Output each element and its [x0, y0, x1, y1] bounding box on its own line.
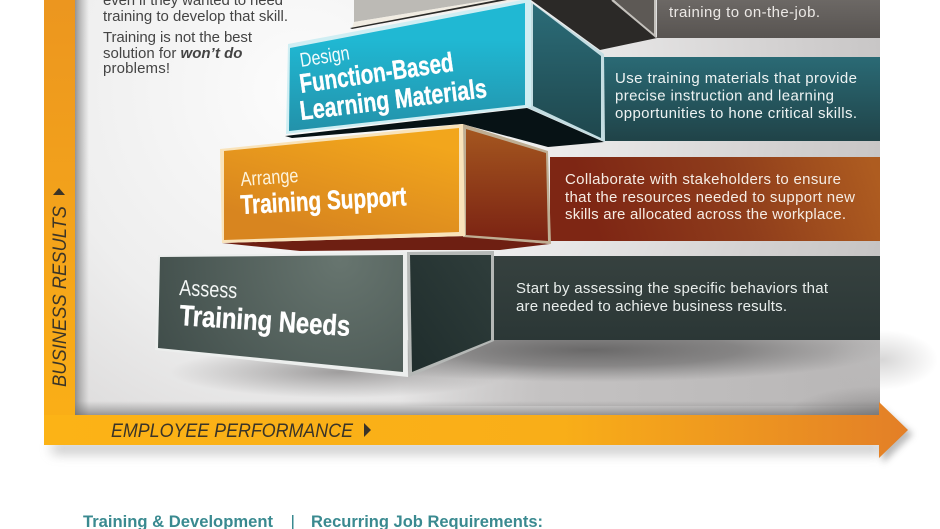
step: arrange training support: Arrange — [240, 165, 299, 191]
footer heading — [83, 513, 543, 529]
band: design materials: Use training materials that provide — [615, 70, 857, 87]
text: won't do note: training to develop that skill. — [103, 8, 288, 25]
text: won't do note: solution for won’t do — [103, 45, 242, 62]
axis drop shadow — [52, 408, 913, 463]
step: design function-based learning materials: Function-Based — [298, 47, 455, 99]
band: design materials — [604, 57, 880, 141]
axis: business results — [44, 0, 75, 445]
band: transfer step — [657, 0, 880, 38]
step: design function-based learning materials — [285, 0, 605, 147]
step: assess training needs: Assess — [179, 275, 238, 303]
text: won't do note: Training is not the best — [103, 29, 253, 46]
outer shadow right of panel — [826, 330, 938, 390]
step: top gray block — [350, 0, 657, 50]
band: assess needs: Start by assessing the specific behaviors that — [516, 280, 829, 297]
step: assess training needs — [155, 251, 494, 377]
axis: employee performance arrow — [44, 402, 908, 458]
step: assess training needs: Training Needs — [179, 300, 351, 343]
band: arrange support: that the resources needed to support new — [565, 189, 855, 206]
band: arrange support — [550, 157, 880, 241]
band: design materials: opportunities to hone critical skills. — [615, 105, 857, 122]
band: assess needs: are needed to achieve business results. — [516, 298, 787, 315]
step: design function-based learning materials: Design — [298, 42, 351, 72]
panel: chart background — [75, 0, 880, 415]
axis: employee performance arrow: EMPLOYEE PERFORMANCE — [111, 421, 353, 442]
axis: business results: BUSINESS RESULTS — [50, 206, 71, 387]
step: arrange training support: Training Support — [240, 181, 407, 220]
text: won't do note: problems! — [103, 60, 170, 77]
band: transfer step: training to on-the-job. — [669, 4, 820, 21]
text: won't do note — [103, 0, 288, 77]
band: assess needs — [493, 256, 880, 340]
step: design function-based learning materials: Learning Materials — [298, 73, 488, 126]
band: arrange support: Collaborate with stakeholders to ensure — [565, 171, 841, 188]
step: arrange training support — [220, 124, 551, 251]
band: design materials: precise instruction and learning — [615, 88, 834, 104]
floor shadow — [75, 340, 880, 415]
band: arrange support: skills are allocated across the workplace. — [565, 206, 846, 223]
